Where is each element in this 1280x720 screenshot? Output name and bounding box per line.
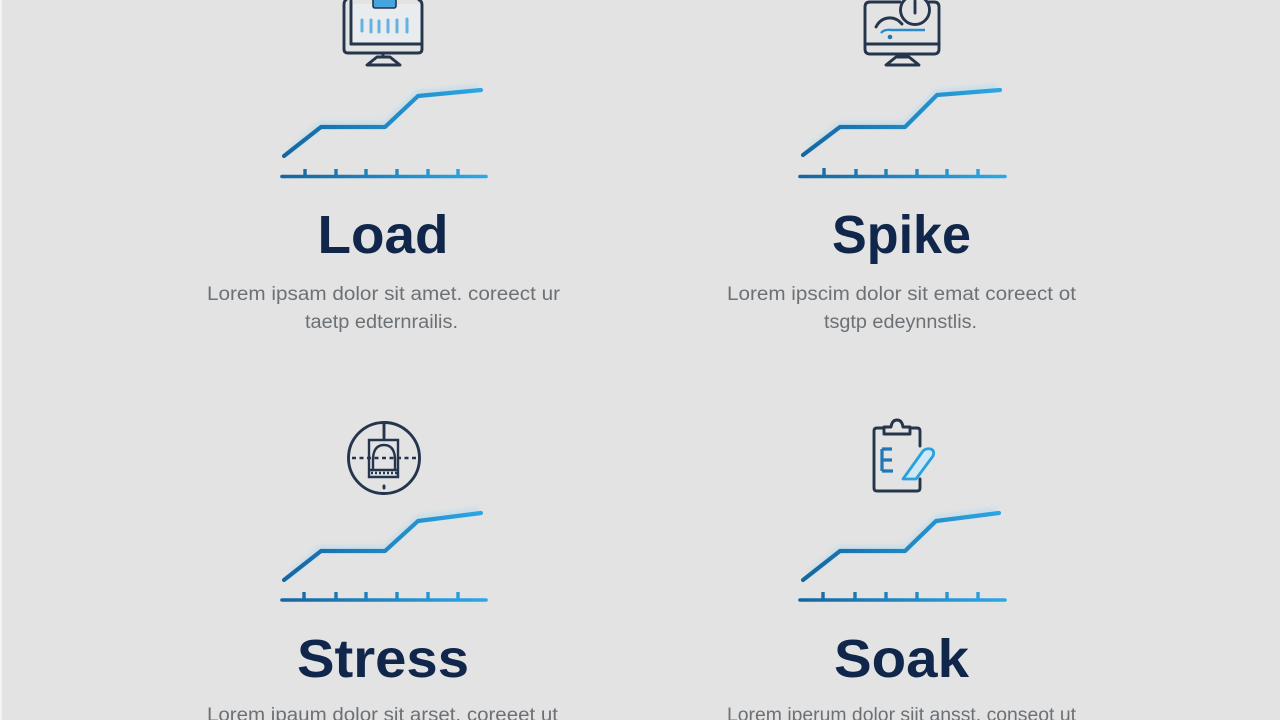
icon: monitor with alert	[865, 0, 939, 65]
icon: monitor with bar chart	[344, 0, 422, 65]
text block: Load description: Lorem ipsam dolor sit amet. coreect ur	[207, 284, 561, 305]
heading: Load: Load	[318, 205, 448, 265]
panel: Soak	[727, 420, 1077, 720]
icon: clipboard with pencil	[874, 420, 934, 491]
text block: Load description: taetp edternrailis.	[305, 312, 458, 333]
line chart	[800, 510, 1005, 600]
heading: Soak: Soak	[834, 629, 970, 689]
panel: Stress	[207, 422, 559, 720]
panel: Load	[207, 0, 561, 333]
line chart	[800, 87, 1005, 176]
text block: Load description	[207, 284, 561, 333]
text block: Spike description: Lorem ipscim dolor sit emat coreect ot	[727, 284, 1077, 305]
heading: Spike: Spike	[832, 205, 971, 265]
panel: Spike	[727, 0, 1077, 333]
text block: Spike description: tsgtp edeynnstlis.	[824, 312, 977, 333]
text block: Spike description	[727, 284, 1077, 333]
line chart	[282, 87, 486, 176]
heading: Stress: Stress	[297, 629, 469, 689]
icon: target crosshair	[348, 422, 420, 494]
line chart	[282, 510, 486, 600]
